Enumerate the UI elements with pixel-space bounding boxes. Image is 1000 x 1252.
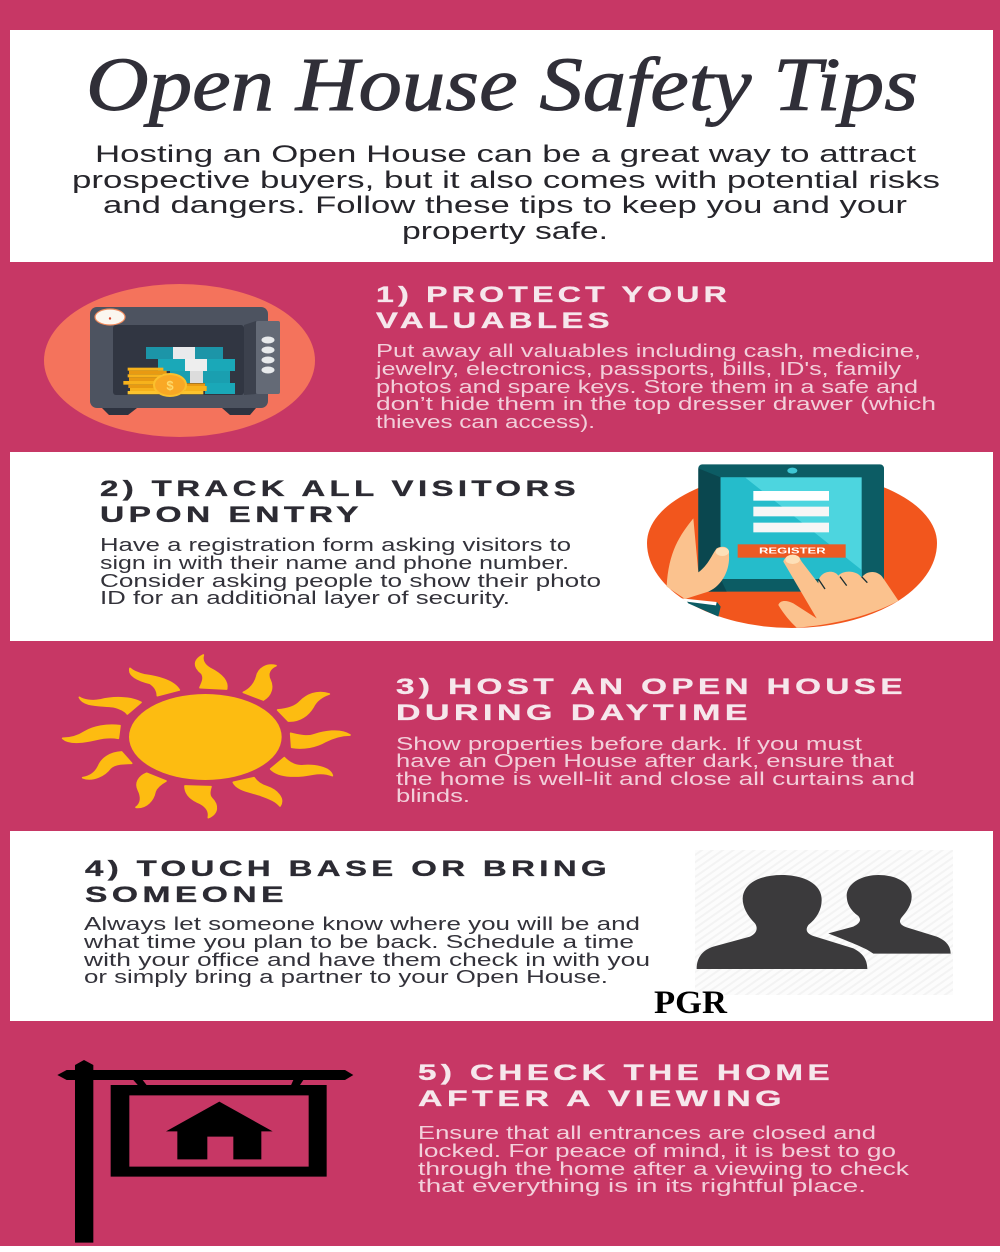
body text: with your office and have them check in with you <box>83 950 650 970</box>
heading: VALUABLES <box>376 308 614 333</box>
body text: have an Open House after dark, ensure that <box>396 751 894 771</box>
heading: 3) HOST AN OPEN HOUSE <box>396 674 907 699</box>
icon: safe <box>44 284 315 437</box>
body text: Always let someone know where you will be and <box>84 914 640 934</box>
heading <box>396 674 907 725</box>
panel: tip 4 touch base <box>10 831 993 1021</box>
body text: Put away all valuables including cash, medicine, <box>376 341 921 361</box>
heading: DURING DAYTIME <box>396 700 752 725</box>
body text: or simply bring a partner to your Open House. <box>84 967 608 987</box>
body text: jewelry, electronics, passports, bills, ID's, family <box>375 359 901 379</box>
heading: UPON ENTRY <box>100 502 363 527</box>
heading: 2) TRACK ALL VISITORS <box>100 476 580 501</box>
icon: tablet register <box>647 464 937 628</box>
body text: that everything is in its rightful place. <box>418 1176 866 1196</box>
intro text: property safe. <box>402 218 608 245</box>
body text: what time you plan to be back. Schedule a time <box>83 932 634 952</box>
body text: locked. For peace of mind, it is best to go <box>418 1141 896 1161</box>
panel: tip 1 protect your valuables <box>44 282 936 437</box>
body text: sign in with their name and phone number. <box>100 553 569 573</box>
panel: tip 5 check the home <box>57 1060 910 1243</box>
body text: through the home after a viewing to check <box>418 1159 910 1179</box>
panel: header <box>10 30 993 262</box>
watermark: PGR: PGR <box>654 985 728 1021</box>
body text: Show properties before dark. If you must <box>396 734 862 754</box>
icon: two people <box>695 850 953 995</box>
body text <box>396 734 915 806</box>
body text: the home is well-lit and close all curtains and <box>396 769 915 789</box>
body text: Ensure that all entrances are closed and <box>418 1123 876 1143</box>
icon: safe: $ <box>166 378 174 393</box>
panel: tip 2 track all visitors <box>10 452 993 641</box>
body text <box>375 341 936 432</box>
icon: sun <box>63 655 350 818</box>
heading <box>418 1060 834 1111</box>
heading: AFTER A VIEWING <box>418 1086 786 1111</box>
body text: blinds. <box>396 786 470 806</box>
body text <box>83 914 650 987</box>
heading: 5) CHECK THE HOME <box>418 1060 834 1085</box>
heading <box>376 282 731 333</box>
intro text: prospective buyers, but it also comes with potential risks <box>72 167 940 194</box>
heading: 1) PROTECT YOUR <box>376 282 731 307</box>
intro text <box>72 141 940 245</box>
heading <box>85 856 611 907</box>
body text: thieves can access). <box>376 412 595 432</box>
panel: tip 3 daytime <box>63 655 915 818</box>
footer strip <box>0 1246 1000 1252</box>
body text <box>100 535 601 608</box>
heading: SOMEONE <box>85 882 288 907</box>
body text: Consider asking people to show their photo <box>100 571 601 591</box>
body text: don’t hide them in the top dresser drawer (which <box>376 394 936 414</box>
title: Open House Safety Tips <box>86 43 918 127</box>
body text <box>418 1123 910 1196</box>
icon: tablet register: REGISTER <box>759 546 826 556</box>
heading <box>100 476 580 527</box>
icon: house for sale sign <box>57 1060 353 1243</box>
body text: photos and spare keys. Store them in a safe and <box>376 377 918 397</box>
body text: ID for an additional layer of security. <box>100 588 510 608</box>
heading: 4) TOUCH BASE OR BRING <box>85 856 611 881</box>
body text: Have a registration form asking visitors to <box>100 535 571 555</box>
intro text: and dangers. Follow these tips to keep you and your <box>103 192 907 219</box>
intro text: Hosting an Open House can be a great way to attract <box>95 141 916 168</box>
